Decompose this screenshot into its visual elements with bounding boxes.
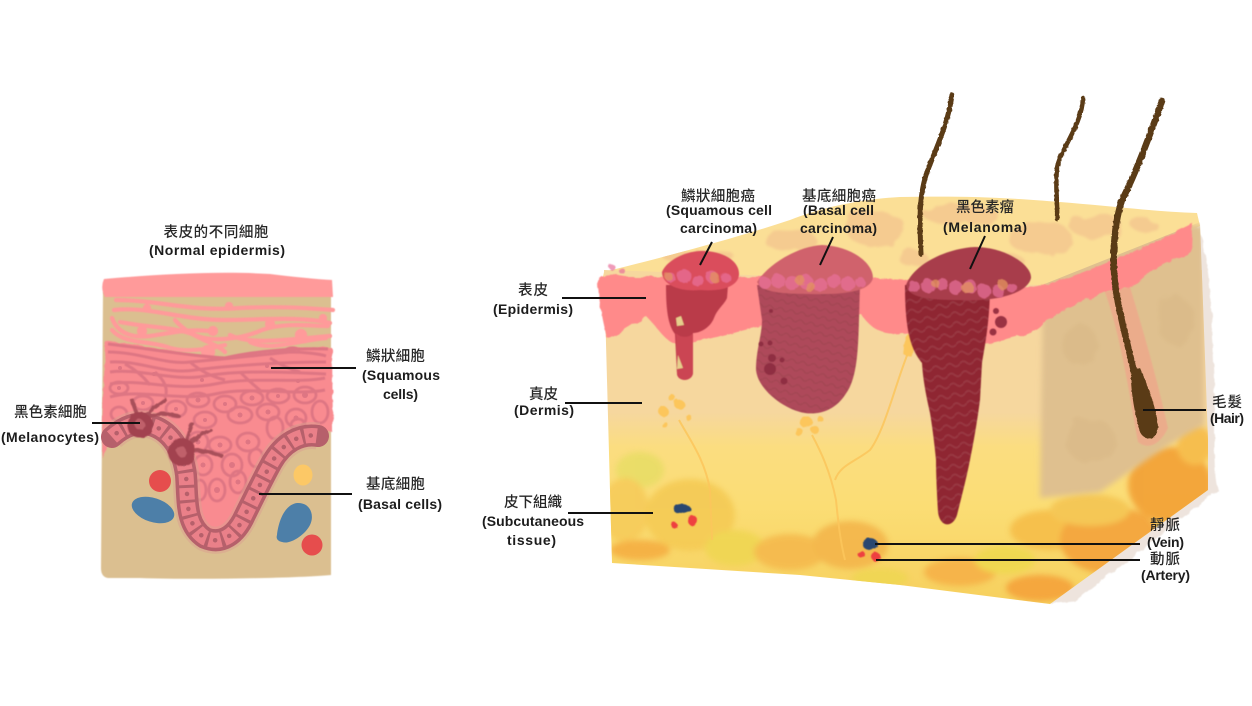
skin cross-section base (101, 292, 331, 579)
label: squamous cell carcinoma (666, 185, 772, 265)
label: melanocytes (1, 401, 140, 445)
label: melanoma: 黑色素瘤 (956, 196, 1014, 217)
label: subcutaneous tissue (482, 491, 653, 548)
label: squamous cells (271, 345, 440, 402)
melanoma (905, 247, 1031, 524)
label: normal epidermis heading: 表皮的不同細胞 (164, 221, 268, 242)
cell nuclei (117, 364, 308, 493)
pigment band across tumours (609, 264, 1017, 298)
basal cell layer (112, 424, 318, 540)
label: hair: (Hair) (1210, 410, 1244, 426)
label: melanocytes: (Melanocytes) (1, 429, 99, 445)
label: normal epidermis heading (149, 221, 285, 258)
flattened upper cells (112, 300, 333, 357)
label: squamous cells: (Squamous (362, 367, 440, 383)
squamous cell outlines (108, 344, 328, 501)
panel: skin cross-section block (598, 95, 1220, 610)
label: epidermis (493, 279, 646, 317)
label: subcutaneous tissue: (Subcutaneous (482, 513, 584, 529)
hair strands (920, 95, 1162, 438)
stratum corneum top band (102, 273, 333, 297)
epidermis layer (598, 223, 1193, 345)
surface blotches (662, 202, 1159, 266)
label: basal cells (259, 473, 442, 512)
label: dermis: 真皮 (529, 383, 558, 404)
melanocytes (127, 400, 222, 466)
label: basal cell carcinoma: carcinoma) (800, 220, 877, 236)
nerve fibres (679, 353, 908, 560)
basal cell carcinoma (756, 245, 873, 413)
label: artery (876, 548, 1190, 583)
label: squamous cell carcinoma: carcinoma) (680, 220, 757, 236)
label: hair: 毛髮 (1212, 391, 1242, 412)
label: melanoma (943, 196, 1027, 269)
label: melanocytes: 黑色素細胞 (14, 401, 87, 422)
infographic: skin cell diagrams (2, 92, 1244, 604)
label: melanoma: (Melanoma) (943, 219, 1027, 235)
blood vessels and nerve spots (128, 464, 322, 556)
label: basal cell carcinoma: (Basal cell (803, 202, 874, 218)
right side tan face (1040, 225, 1204, 498)
top skin surface (600, 197, 1200, 300)
label: vein (875, 514, 1184, 550)
label: subcutaneous tissue: tissue) (507, 532, 556, 548)
panel: normal epidermis (101, 273, 333, 579)
squamous cell layer (102, 341, 333, 548)
label: epidermis: (Epidermis) (493, 301, 573, 317)
label: basal cells: (Basal cells) (358, 496, 442, 512)
vein and artery, lower group (858, 538, 880, 562)
label: vein: 靜脈 (1150, 514, 1180, 535)
back shadow (1050, 225, 1218, 604)
label: basal cell carcinoma: 基底細胞癌 (802, 185, 876, 206)
vein and artery, left group (671, 504, 698, 528)
label: subcutaneous tissue: 皮下組織 (504, 491, 562, 512)
nerve endings (659, 333, 914, 436)
label: dermis: (Dermis) (514, 402, 574, 418)
label: squamous cells: 鱗狀細胞 (366, 345, 425, 366)
label: squamous cells: cells) (383, 386, 418, 402)
label: basal cells: 基底細胞 (366, 473, 425, 494)
hair follicle (1105, 287, 1168, 446)
squamous cell carcinoma (662, 251, 739, 380)
label: normal epidermis heading: (Normal epidermis) (149, 242, 285, 258)
label: hair (1143, 391, 1244, 426)
label: artery: 動脈 (1150, 548, 1180, 569)
label: squamous cell carcinoma: (Squamous cell (666, 202, 772, 218)
label: epidermis: 表皮 (518, 279, 548, 300)
label: squamous cell carcinoma: 鱗狀細胞癌 (681, 185, 755, 206)
label: basal cell carcinoma (800, 185, 877, 265)
dermis and subcutaneous body (600, 225, 1220, 610)
label: artery: (Artery) (1141, 567, 1190, 583)
subcutaneous blotches (601, 425, 1213, 601)
label: vein: (Vein) (1147, 534, 1184, 550)
label: dermis (514, 383, 642, 418)
